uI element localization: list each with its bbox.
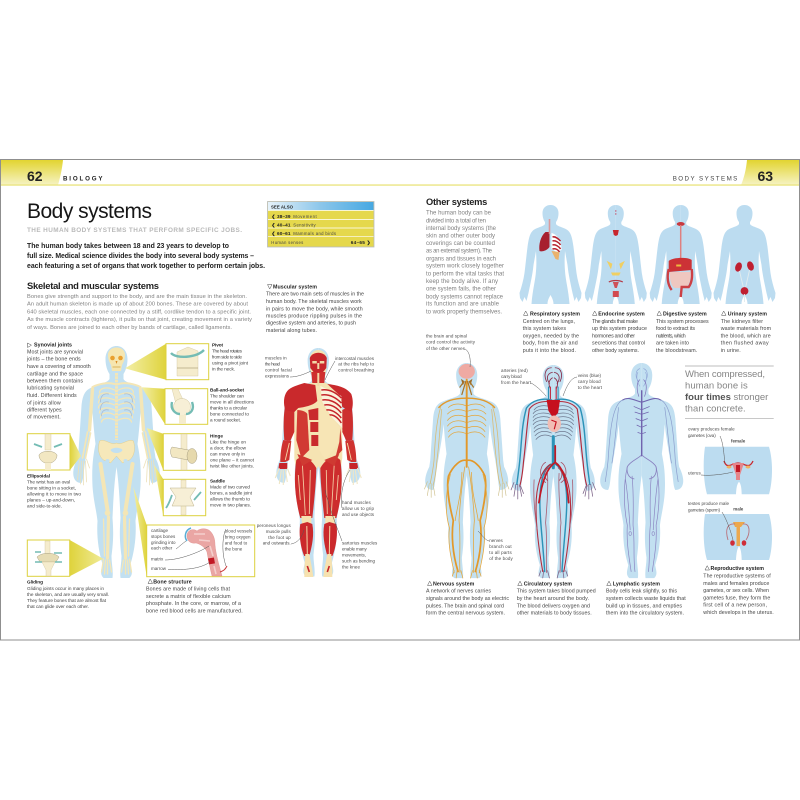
pull quote: than concrete.: [685, 404, 746, 414]
urinary caption: The kidneys filter: [721, 319, 763, 325]
figure: urinary system: [714, 205, 776, 304]
digestive caption: nutrients, which: [656, 333, 686, 339]
ellipsoidal text: and side-to-side.: [27, 504, 62, 509]
bone labels: stops bones: [151, 534, 176, 539]
male reproductive diagram: male: [733, 506, 744, 511]
see also box: SEE ALSO: [271, 204, 294, 210]
ellipsoidal text: The wrist has an oval: [27, 480, 70, 485]
nerve network: [424, 380, 509, 578]
muscular system text: There are two main sets of muscles in the: [266, 292, 364, 298]
gliding text: Gliding: [27, 580, 43, 585]
bone structure text: bone red blood cells are manufactured.: [146, 608, 243, 614]
reproductive system caption: The reproductive systems of: [703, 573, 771, 579]
bone structure text: secrete a matrix of flexible calcium: [146, 594, 231, 600]
muscle labels: such as bending: [342, 559, 375, 564]
joint: saddle: [163, 479, 206, 516]
saddle text: move in two planes.: [210, 503, 251, 508]
synovial joints text: different types: [27, 408, 62, 414]
hip muscles: [297, 454, 339, 466]
digestive caption: This system processes: [656, 319, 709, 325]
skeletal paragraph: Bones give strength and support to the body, and are the main tissue in the skeleton.: [27, 294, 247, 300]
reproductive system caption: gametes, or sex cells. When: [703, 588, 769, 594]
synovial joints text: lubricating synovial: [27, 386, 74, 392]
muscle labels: movements,: [342, 553, 366, 558]
pivot text: in the neck.: [212, 367, 235, 372]
see also box: Human senses: [271, 240, 303, 245]
see also box: ❮ 38–39: [272, 214, 291, 220]
nervous labels: the brain and spinal: [426, 334, 467, 339]
cream base body: [294, 350, 342, 472]
female reproductive diagram: gametes (ova): [688, 433, 716, 438]
bone structure panel: [147, 525, 255, 577]
skeletal paragraph: An adult human skeleton is made up of about 200 bones. These are covered by about: [27, 302, 248, 308]
bone labels: [151, 528, 253, 571]
synovial joints text: fluid. Different kinds: [27, 393, 77, 399]
synovial joints text: of joints allow: [27, 400, 61, 406]
gliding text: [27, 580, 109, 609]
bone labels: and food to: [225, 541, 248, 546]
abdominal wedge: [319, 402, 342, 460]
muscular system text: material along tubes.: [266, 328, 317, 334]
digestive caption: are taken into: [656, 341, 689, 347]
reproductive system caption: which develops in the uterus.: [703, 610, 774, 616]
muscular system text: [266, 284, 364, 334]
heading: other systems: Other systems: [426, 197, 487, 207]
joint: ball and socket: [165, 389, 208, 424]
lymphatic system caption: system collects waste liquids that: [606, 596, 686, 602]
saddle text: [210, 479, 253, 508]
spine: [115, 373, 118, 440]
saddle text: Saddle: [210, 479, 225, 484]
synovial joints text: Synovial joints: [34, 342, 72, 348]
circulatory labels: to the heart: [578, 385, 603, 390]
see also box: ❮ 40–41: [272, 222, 291, 228]
blood vessels: [511, 368, 596, 578]
ball-and-socket text: a round socket.: [210, 418, 241, 423]
male reproductive diagram: [688, 501, 772, 560]
digestive caption: Digestive system: [663, 311, 707, 317]
endocrine caption: hormones and other: [592, 333, 635, 339]
synovial joints text: joints – the bone ends: [26, 357, 81, 363]
ball-and-socket text: Ball-and-socket: [210, 388, 244, 392]
muscular system text: in pairs to move the body, while smooth: [266, 306, 363, 312]
other systems paragraph: system work closely together: [426, 264, 504, 270]
circulatory system caption: other materials to body tissues.: [517, 610, 592, 616]
pull quote: When compressed,: [685, 369, 765, 380]
respiratory caption: Centred on the lungs,: [523, 319, 575, 325]
reproductive system caption: [703, 566, 774, 616]
circulatory labels: [501, 368, 603, 396]
reproductive system caption: males and females produce: [703, 581, 769, 587]
muscle labels: hand muscles: [342, 500, 371, 505]
endocrine caption: [592, 311, 647, 354]
muscle labels: the head: [265, 362, 280, 367]
left chest muscles: [284, 383, 317, 412]
muscle labels: intercostal muscles: [335, 356, 375, 361]
skeletal paragraph: [27, 294, 252, 331]
respiratory caption: [523, 311, 580, 354]
muscle labels: control breathing: [338, 368, 374, 373]
ball-and-socket text: bone connected to: [210, 412, 249, 417]
bone labels: bring oxygen: [225, 535, 251, 540]
spread frame: [0, 160, 800, 640]
reproductive system caption: first cell of a new person,: [703, 603, 767, 609]
nervous system figure: [424, 363, 509, 578]
joint: gliding: [27, 540, 70, 576]
nervous labels: nerves: [489, 538, 503, 543]
saddle text: allows the thumb to: [210, 497, 250, 502]
other systems paragraph: body systems cannot replace: [426, 294, 504, 300]
other systems paragraph: [426, 211, 504, 315]
ball-and-socket text: [210, 388, 255, 423]
synovial joints text: cartilage and the space: [27, 371, 83, 377]
muscle labels: and outwards.: [263, 541, 291, 546]
lymph vessels: [605, 369, 678, 572]
circulatory system caption: The blood delivers oxygen and: [517, 603, 590, 609]
synovial joints text: Most joints are synovial: [27, 349, 83, 355]
urinary caption: Urinary system: [728, 311, 767, 317]
hinge text: Hinge: [210, 434, 223, 438]
see also box: Mammals and birds: [293, 231, 336, 236]
bone labels: blood vessels: [225, 529, 253, 534]
lymphatic system caption: build up in tissues, and empties: [606, 603, 682, 609]
endocrine caption: secretions that control: [592, 341, 645, 347]
bone labels: marrow: [151, 566, 167, 571]
muscle labels: enable many: [342, 547, 367, 552]
muscle labels: muscles in: [265, 356, 287, 361]
lymphatic system caption: [606, 581, 686, 616]
respiratory caption: body, from the air and: [523, 341, 578, 347]
skeletal paragraph: 640 skeletal muscles, each one connected by a stiff, cordlike tendon to a specific joint.: [27, 310, 251, 316]
other systems paragraph: keep the body alive. If any: [426, 279, 498, 285]
respiratory caption: oxygen, needed by the: [523, 333, 579, 339]
circulatory system figure: [511, 365, 596, 578]
bone labels: each other: [151, 546, 173, 551]
lymphatic system caption: Body cells leak slightly, so this: [606, 589, 677, 595]
pivot text: [212, 343, 249, 372]
subtitle: THE HUMAN BODY SYSTEMS THAT PERFORM SPECIFIC JOBS.: [27, 227, 242, 234]
urinary organs: [734, 260, 755, 302]
nervous system caption: [426, 581, 509, 616]
reproductive system caption: Reproductive system: [710, 566, 764, 572]
circulatory system caption: Circulatory system: [524, 582, 572, 588]
see also box: Movement: [293, 214, 317, 219]
right deltoid: [327, 384, 353, 412]
urinary caption: the blood, which are: [721, 333, 771, 339]
pull quote: four times stronger: [685, 392, 768, 403]
left page header: 62: [27, 168, 43, 184]
female reproductive diagram: ovary produces female: [688, 426, 735, 432]
exposed ribs: [320, 386, 342, 428]
urinary caption: waste materials from: [721, 326, 772, 332]
see also box: Sensitivity: [293, 222, 317, 228]
intro paragraph: [27, 243, 265, 270]
circulatory labels: carry blood: [501, 374, 522, 379]
saddle text: Made of two curved: [210, 485, 250, 490]
urinary caption: [721, 311, 772, 354]
other systems paragraph: internal body systems (the: [426, 226, 497, 232]
left page header: [1, 160, 400, 186]
skeletal paragraph: of ways. Bones are joined to each other by bands of cartilage, called ligaments.: [27, 325, 232, 331]
muscle labels: expressions: [265, 374, 290, 379]
muscle labels: the foot up: [268, 535, 291, 540]
gliding text: Gliding joints occur in many places in: [27, 586, 104, 591]
ellipsoidal text: planes – up-and-down,: [27, 498, 75, 503]
muscle labels: at the ribs help to: [338, 362, 374, 367]
hinge text: a door, the elbow: [210, 446, 247, 451]
synovial joints text: [26, 342, 91, 421]
muscle figure: [275, 348, 361, 577]
hinge text: one plane – it cannot: [210, 458, 255, 463]
other systems paragraph: coverings can be counted: [426, 241, 495, 247]
other systems paragraph: one system fails, the other: [426, 287, 496, 293]
lungs: [539, 219, 562, 260]
muscular system text: Muscular system: [273, 284, 317, 290]
testes and ducts: [727, 522, 749, 546]
femur illustration: [185, 528, 227, 576]
synovial joints text: between them contains: [27, 379, 83, 385]
digestive caption: food to extract its: [656, 326, 695, 332]
muscle labels: control facial: [265, 368, 292, 373]
other systems paragraph: to perform the vital tasks that: [426, 271, 504, 277]
nervous system caption: form the central nervous system.: [426, 610, 505, 616]
pull quote: [685, 366, 774, 418]
pull quote: human bone is: [685, 380, 748, 392]
circulatory system caption: [517, 581, 596, 616]
muscle labels: [257, 356, 378, 570]
ball-and-socket text: move in all directions: [210, 400, 255, 405]
muscular system text: digestive system and arteries, to push: [266, 321, 356, 327]
hinge text: Like the hinge on: [210, 440, 246, 445]
female reproductive diagram: uterus: [688, 471, 701, 476]
gliding text: the skeleton, and are usually very small.: [27, 592, 109, 597]
lymphatic system caption: them into the circulatory system.: [606, 610, 684, 616]
nervous labels: to all parts: [489, 550, 512, 555]
muscle labels: the knee: [342, 565, 360, 570]
muscle labels: allow us to grip: [342, 506, 374, 511]
ball-and-socket text: The shoulder can: [210, 394, 244, 399]
yellow callout wedges: [70, 344, 166, 577]
lymphatic system caption: Lymphatic system: [613, 582, 660, 588]
joint: pivot: [166, 344, 209, 380]
nervous system caption: signals around the body as electric: [426, 596, 509, 602]
endocrine glands: [608, 210, 624, 297]
brain: [459, 364, 475, 385]
circulatory labels: from the heart: [501, 380, 532, 385]
male reproductive diagram: testes produce male: [688, 501, 729, 506]
ellipsoidal text: [27, 474, 81, 509]
nervous labels: branch out: [489, 544, 512, 549]
left obliques: [296, 410, 309, 458]
lymphatic system figure: [600, 363, 683, 578]
ellipsoidal text: Ellipsoidal: [27, 474, 50, 479]
male reproductive diagram: gametes (sperm): [688, 508, 720, 512]
hinge text: twist like other joints.: [210, 464, 254, 469]
synovial joints text: of movement.: [27, 415, 61, 421]
circulatory labels: veins (blue): [578, 373, 602, 378]
muscle labels: muscle pulls: [266, 529, 291, 534]
muscular system text: muscles produce rippling pulses in the: [266, 314, 362, 320]
bone leader lines: [165, 531, 226, 570]
circulatory labels: arteries (red): [501, 368, 528, 373]
uterus: [724, 461, 753, 480]
other systems paragraph: organs and tissues in each: [426, 256, 496, 262]
nervous system caption: Nervous system: [433, 582, 475, 588]
other systems paragraph: skin and other outer body: [426, 234, 495, 240]
figure: endocrine system: [585, 205, 647, 304]
bone labels: matrix: [151, 557, 164, 562]
endocrine caption: The glands that make: [592, 319, 638, 325]
circulatory system caption: This system takes blood pumped: [517, 589, 596, 595]
joint: hinge: [163, 434, 206, 470]
skull: [108, 348, 125, 371]
digestive caption: [656, 311, 709, 354]
gliding text: They feature bones that are almost flat: [27, 598, 107, 603]
bone labels: cartilage: [151, 528, 169, 533]
intro paragraph: each featuring a set of organs that work together to perform certain jobs.: [27, 263, 265, 270]
female reproductive diagram: female: [731, 439, 746, 444]
endocrine caption: Endocrine system: [598, 311, 645, 317]
heading: skeletal and muscular systems: Skeletal and muscular systems: [27, 280, 159, 291]
head muscles: [310, 353, 327, 386]
synovial joints text: have a covering of smooth: [27, 364, 91, 370]
see also box: 64–65 ❯: [351, 240, 371, 246]
see also box: [268, 202, 374, 247]
urinary caption: in urine.: [721, 348, 741, 354]
nervous system caption: pulses. The brain and spinal cord: [426, 603, 504, 609]
bone structure text: phosphate. In the core, or marrow, of a: [146, 601, 241, 607]
skeleton figure: [73, 346, 160, 578]
title: Body systems: [27, 200, 152, 223]
abdominal muscles: [308, 408, 318, 446]
bone structure text: Bones are made of living cells that: [146, 586, 231, 592]
nervous labels: of the body: [489, 556, 513, 561]
respiratory caption: Respiratory system: [530, 311, 580, 317]
pivot text: Pivot: [212, 343, 223, 348]
respiratory caption: this system takes: [523, 326, 566, 332]
joint: ellipsoidal: [27, 434, 70, 470]
intro paragraph: The human body takes between 18 and 23 years to develop to: [27, 243, 229, 250]
muscular system text: human body. The skeletal muscles work: [266, 299, 362, 305]
gliding text: that can glide over each other.: [27, 604, 89, 609]
muscle labels: and use objects: [342, 512, 375, 517]
hinge text: [210, 434, 255, 469]
bone labels: the bone: [225, 546, 243, 551]
figure: respiratory system: [520, 205, 582, 304]
nervous labels: cord control the activity: [426, 340, 476, 345]
right page header: [400, 160, 799, 186]
hinge text: can move only in: [210, 452, 245, 457]
other systems paragraph: as an external system). The: [426, 249, 493, 255]
bone labels: grinding into: [151, 540, 176, 545]
pivot text: from side to side: [212, 355, 242, 360]
female reproductive diagram: [688, 426, 772, 494]
digestive caption: the bloodstream.: [656, 348, 697, 354]
heart and aorta: [547, 400, 561, 432]
muscle labels: peroneus longus: [257, 523, 291, 528]
other systems paragraph: its function and are unable: [426, 302, 500, 308]
saddle text: bones, a saddle joint: [210, 491, 253, 496]
nervous labels: [426, 334, 513, 561]
bone structure text: [146, 579, 243, 614]
pivot text: using a pivot joint: [212, 361, 249, 366]
digestive organs: [668, 222, 692, 297]
intro paragraph: full size. Medical science divides the body into several body systems –: [27, 253, 254, 260]
ellipsoidal text: allowing it to move in two: [27, 492, 81, 497]
other systems paragraph: The human body can be: [426, 211, 492, 217]
muscle labels: sartorius muscles: [342, 541, 378, 546]
respiratory caption: puts it into the blood.: [523, 348, 576, 354]
left page header: BIOLOGY: [63, 176, 103, 183]
ellipsoidal text: bone sitting in a socket,: [27, 486, 76, 491]
bone structure text: Bone structure: [153, 579, 192, 585]
circulatory system caption: by the heart around the body.: [517, 596, 589, 602]
muscle leader lines: [290, 361, 350, 544]
reproductive system caption: gametes fuse, they form the: [703, 595, 770, 601]
pivot text: The head rotates: [212, 349, 243, 354]
see also box: ❮ 60–61: [272, 231, 291, 237]
endocrine caption: up this system produce: [592, 326, 647, 332]
pelvis: [99, 440, 134, 463]
other systems paragraph: divided into a total of ten: [426, 218, 486, 224]
other systems paragraph: to work properly themselves.: [426, 309, 502, 315]
nervous system caption: A network of nerves carries: [426, 589, 491, 595]
endocrine caption: other body systems.: [592, 348, 639, 354]
circulatory labels: carry blood: [578, 379, 601, 384]
nervous labels: of the other nerves: [426, 346, 466, 351]
ball-and-socket text: thanks to a circular: [210, 406, 247, 411]
skeletal paragraph: As the muscle contracts (tightens), it pulls on that joint, creating movement in a variety: [27, 317, 252, 323]
urinary caption: then flushed away: [721, 341, 769, 347]
figure: digestive system: [650, 205, 712, 304]
right page header: 63: [758, 168, 773, 184]
right page header: BODY SYSTEMS: [673, 176, 737, 183]
